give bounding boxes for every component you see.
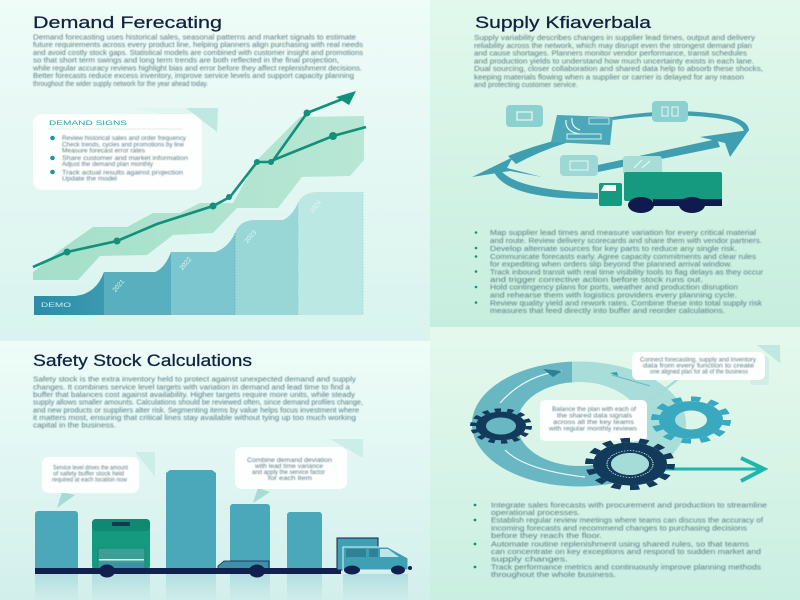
list: process points: incoming forecasts and recommend changes to purchasing decisions (491, 526, 748, 532)
icon: photo square (560, 155, 598, 176)
icon: teal gear (655, 399, 727, 441)
callout: demand signals: Measure forecast error rates (62, 148, 145, 154)
callout: demand signals: Share customer and market information (62, 155, 189, 162)
icon: supplier square (506, 105, 543, 127)
callout: demand signals (33, 108, 218, 190)
list: supply points (475, 230, 764, 315)
heading: supply variability: Supply Kfiaverbala (475, 13, 652, 32)
stepped bars: DEMO (41, 302, 71, 309)
arrow: output (660, 458, 764, 481)
callout: centre note: the shared data signals (557, 412, 632, 420)
list: process points: Establish regular review meetings where teams can discuss the accuracy of (491, 518, 763, 524)
list: process points: supply changes. (491, 556, 568, 564)
text block: supply intro: Supply variability describes changes in supplier lead times, output and delivery (474, 35, 756, 42)
list: process points: operational processes. (491, 510, 580, 517)
arrow: ring direction (543, 369, 562, 377)
list: supply points: and rehearse them with logistics providers every planning cycle. (490, 292, 737, 300)
callout: centre note (540, 400, 647, 441)
text block: safety stock intro: Safety stock is the extra inventory held to protect against unexpected demand and supply (33, 376, 357, 384)
small vehicle (218, 561, 269, 570)
callout: demand signals: Check trends, cycles and promotions by line (62, 142, 185, 148)
callout: service level note: of safety buffer stock held (53, 470, 125, 478)
panel: safety stock calculations (33, 351, 412, 600)
icon: document (551, 115, 613, 145)
text block: safety stock intro: supply allows smaller amounts. Calculations should be reviewed often, since demand profiles change, (33, 400, 363, 406)
text block: supply intro (474, 35, 763, 89)
list: process points: can concentrate on key exceptions and respond to sudden market and (491, 549, 761, 556)
list: process points (474, 502, 767, 579)
arrow head (336, 91, 356, 105)
text block: safety stock intro: it matters most, ensuring that critical lines stay available without tying up too much working (33, 415, 356, 422)
list: supply points: Map supplier lead times and measure variation for every critical material (490, 230, 757, 237)
icon: network square (623, 156, 662, 175)
callout: lead time note: with lead time variance (254, 463, 324, 470)
list: process points: before they reach the floor. (491, 533, 602, 540)
callout: service level note (42, 452, 155, 508)
list: supply points: Review quality yield and rework rates. Combine these into total supply risk (490, 300, 763, 308)
chart: stock level bars (35, 470, 412, 600)
list: supply points: and route. Review delivery scorecards and share them with vendor partners. (490, 238, 762, 245)
text block: safety stock intro (33, 376, 363, 430)
text block: supply intro: keeping materials flowing when a supplier or carrier is delayed for any reason (474, 74, 744, 82)
callout: demand signals: Track actual results against projection (62, 170, 184, 176)
text block: safety stock intro: changes. It combines service level targets with variation in demand and lead time to find a (33, 384, 350, 392)
list: supply points: for expediting when orders slip beyond the planned arrival window. (490, 262, 732, 268)
callout: lead time note: Combine demand deviation (247, 457, 333, 464)
stepped bars: 2023 (244, 229, 258, 245)
text block: demand forecasting intro: Better forecasts reduce excess inventory, improve service levels and support capacity planning (33, 73, 354, 80)
icon: truck (599, 172, 722, 213)
list: supply points: Communicate forecasts early. Agree capacity commitments and clear rules (490, 254, 757, 261)
text block: safety stock intro: capital in the business. (33, 422, 116, 430)
callout: service level note: required at each location now (52, 476, 127, 484)
panel: demand forecasting (32, 13, 366, 315)
heading: demand forecasting: Demand Ferecating (33, 13, 222, 32)
list: process points: Integrate sales forecasts with procurement and production to streamline (491, 502, 767, 510)
chart: demand growth area and line (33, 91, 366, 315)
panel: supply variability (472, 13, 764, 315)
panel: integrated process (472, 345, 781, 579)
callout: service level note: Service level drives the amount (53, 464, 128, 472)
callout: demand signals: Update the model (62, 176, 117, 182)
list: supply points: Track inbound transit with real time visibility tools to flag delays as they occur (490, 270, 764, 276)
list: supply points: measures that feed directly into buffer and reorder calculations. (490, 308, 725, 315)
text block: demand forecasting intro: Demand forecasting uses historical sales, seasonal patterns and market signals to estimate (33, 34, 356, 42)
list: supply points: Develop alternate sources for key parts to reduce any single risk. (490, 246, 737, 253)
text block: supply intro: Dual sourcing, closer collaboration and shared data help to absorb these shocks, (474, 66, 763, 73)
icon: small dark gear (473, 410, 529, 442)
diagram: supply cycle (472, 101, 749, 213)
reflection (35, 574, 408, 600)
forecast band (33, 116, 364, 280)
text block: demand forecasting intro: throughout the wider supply network for the year ahead today. (33, 81, 208, 88)
callout: demand signals: Review historical sales and order frequency (62, 135, 187, 142)
ring: pale section (472, 362, 686, 487)
callout: centre note: across all the key teams (553, 419, 634, 426)
callout: top note: data from every function to create (643, 362, 755, 370)
callout: lead time note: and apply the service factor (252, 469, 325, 476)
icon: large dark gear (589, 440, 671, 488)
icon: data square (652, 101, 688, 122)
text block: demand forecasting intro: so that short term swings and long term trends are both reflected in the final projection, (33, 58, 339, 64)
icon: delivery van (337, 538, 412, 574)
list: supply points: and trigger corrective action before stock runs out. (490, 277, 703, 284)
callout: demand signals: Adjust the demand plan monthly (62, 161, 154, 168)
callout: top note: Connect forecasting, supply and inventory (640, 356, 757, 364)
ring: dark section (472, 362, 612, 486)
list: process points: Track performance metrics and continuously improve planning methods (491, 564, 762, 572)
callout: lead time note: for each item (268, 475, 312, 482)
text block: supply intro: reliability across the network, which may disrupt even the strongest demand plan (474, 43, 752, 50)
heading: safety stock calculations: Safety Stock Calculations (33, 351, 252, 370)
text block: supply intro: and production yields to understand how much uncertainty exists in each lane. (474, 58, 754, 66)
callout: top note (632, 345, 781, 401)
arrow: supply cycle left (472, 138, 598, 199)
callout: top note: one aligned plan for all of the business (650, 368, 748, 376)
list: process points: Automate routine replenishment using shared rules, so that teams (491, 542, 750, 548)
text block: supply intro: and cause shortages. Planners monitor vendor performance, transit schedules (474, 50, 748, 58)
stepped bars: 2022 (179, 256, 193, 272)
trend line: forecast (271, 127, 366, 161)
stepped bars: 2024 (309, 199, 323, 215)
text block: demand forecasting intro (32, 34, 364, 88)
stepped bars (34, 192, 363, 315)
callout: centre note: with regular monthly reviews (548, 426, 637, 432)
text block: safety stock intro: and new products or suppliers alter risk. Segmenting items by value helps focus investment where (33, 408, 359, 414)
list: supply points: Hold contingency plans for ports, weather and production disruption (490, 284, 738, 292)
text block: safety stock intro: buffer that balances cost against availability. Higher targets require more units, while steady (33, 392, 356, 399)
ring highlights (500, 371, 562, 403)
callout: lead time note (235, 439, 363, 503)
bar: green container (92, 519, 150, 570)
callout: centre note: Balance the plan with each of (552, 406, 636, 413)
diagram: planning ring (472, 362, 686, 487)
text block: demand forecasting intro: future requirements across every product line, helping planners align purchasing with real needs (33, 42, 364, 49)
text block: demand forecasting intro: and avoid costly stock gaps. Statistical models are combined with customer insight and promotions (33, 50, 364, 57)
text block: demand forecasting intro: while regular accuracy reviews highlight bias and error before they affect replenishment decisions. (32, 66, 362, 72)
list: process points: throughout the whole business. (491, 572, 616, 579)
arrow: supply cycle right (598, 111, 749, 172)
trend line: actual (33, 98, 345, 267)
baseline (35, 568, 341, 574)
stepped bars: 2021 (112, 278, 126, 294)
text block: supply intro: and protecting customer service. (474, 82, 578, 89)
callout: demand signals: DEMAND SIGNS (49, 120, 128, 127)
data points (64, 110, 337, 256)
